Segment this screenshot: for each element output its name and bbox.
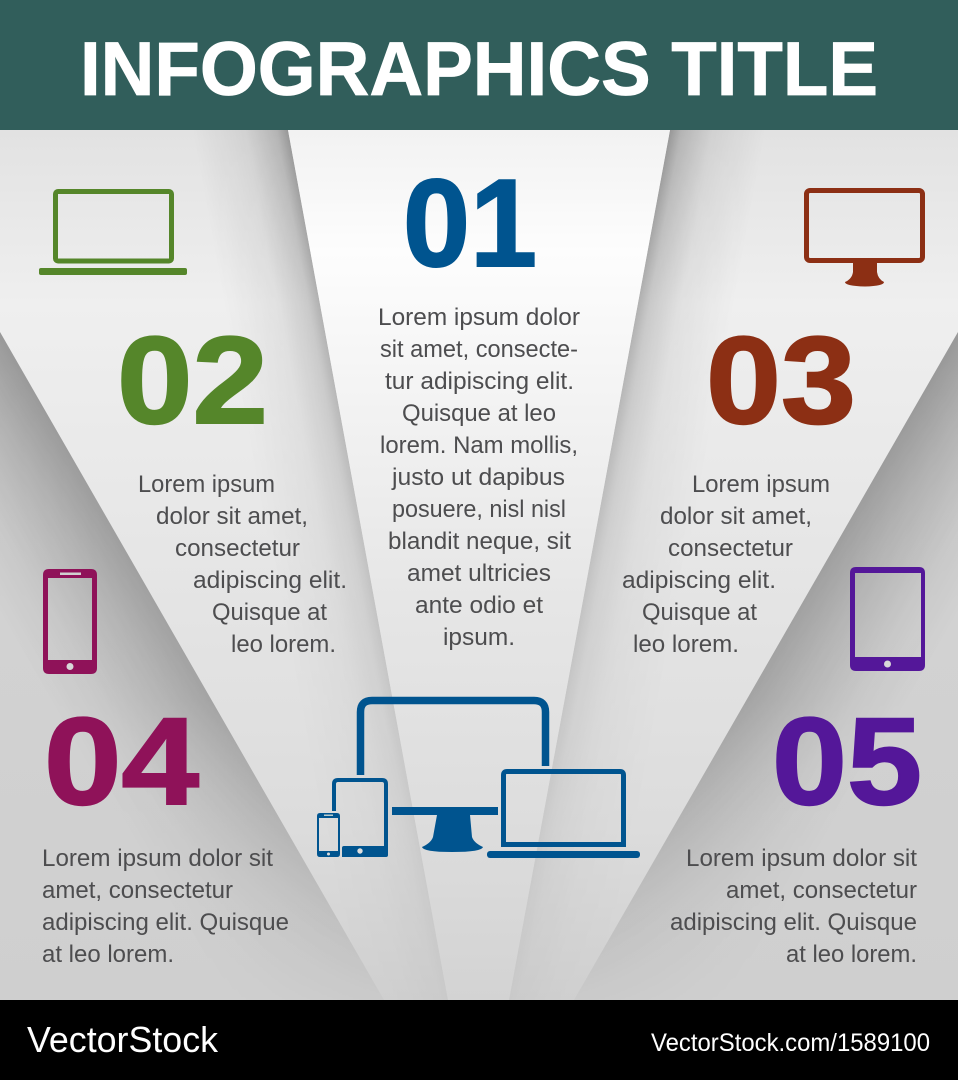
icon: tablet purple [850, 567, 925, 671]
icon: laptop blue [487, 772, 640, 858]
text block 01: ante odio et [415, 592, 543, 619]
text block 01: sit amet, consecte- [380, 336, 578, 363]
text block 01: justo ut dapibus [391, 464, 565, 491]
number 05: 05 [772, 693, 922, 831]
text block 01: blandit neque, sit [388, 528, 571, 555]
title banner [0, 0, 958, 130]
text block 01: Quisque at leo [402, 400, 556, 427]
text block 05 [670, 845, 917, 968]
text block 04: Lorem ipsum dolor sit [42, 845, 273, 872]
text block 03: dolor sit amet, [660, 503, 812, 530]
text block 05: at leo lorem. [786, 941, 917, 968]
text block 01: Lorem ipsum dolor [378, 304, 580, 331]
icon: tablet blue [334, 780, 388, 857]
icon: monitor blue [360, 700, 546, 852]
text block 05: adipiscing elit. Quisque [670, 909, 917, 936]
panel: 03 [622, 190, 922, 658]
number 03: 03 [706, 312, 856, 450]
text block 03: Lorem ipsum [692, 471, 830, 498]
panel: 02 [39, 192, 347, 658]
text block 03: Quisque at [642, 599, 757, 626]
text block 04: amet, consectetur [42, 877, 233, 904]
text block 04 [42, 845, 289, 968]
icon: laptop green [39, 192, 187, 275]
text block 01: lorem. Nam mollis, [380, 432, 578, 459]
number 02: 02 [117, 312, 268, 450]
text block 04: at leo lorem. [42, 941, 174, 968]
text block 01: ipsum. [443, 624, 515, 651]
text block 03: leo lorem. [633, 631, 739, 658]
text block 01: tur adipiscing elit. [385, 368, 574, 395]
text block 05: amet, consectetur [726, 877, 917, 904]
panel: 05 [670, 567, 925, 968]
text block 03: adipiscing elit. [622, 567, 776, 594]
text block 02 [138, 471, 347, 658]
text block 02: Quisque at [212, 599, 327, 626]
icon: monitor red [806, 190, 922, 286]
text block 01: amet ultricies [407, 560, 551, 587]
panel: 04 [42, 569, 289, 968]
footer url: VectorStock.com/1589100 [651, 1029, 930, 1057]
text block 05: Lorem ipsum dolor sit [686, 845, 917, 872]
text block 04: adipiscing elit. Quisque [42, 909, 289, 936]
icon: phone blue [317, 813, 340, 857]
text block 02: Lorem ipsum [138, 471, 275, 498]
text block 02: dolor sit amet, [156, 503, 308, 530]
icon: phone magenta [43, 569, 97, 674]
number 01: 01 [403, 155, 537, 293]
text block 03 [622, 471, 830, 658]
icon group: devices [317, 700, 640, 858]
text block 02: leo lorem. [231, 631, 336, 658]
footer bar [0, 1000, 958, 1080]
title: INFOGRAPHICS TITLE [80, 27, 878, 112]
text block 02: consectetur [175, 535, 300, 562]
text block 03: consectetur [668, 535, 793, 562]
text block 02: adipiscing elit. [193, 567, 347, 594]
text block 01 [378, 304, 580, 651]
number 04: 04 [44, 693, 199, 831]
footer logo: VectorStock [27, 1019, 219, 1060]
panel: 01 center [378, 155, 580, 651]
text block 01: posuere, nisl nisl [392, 496, 566, 523]
